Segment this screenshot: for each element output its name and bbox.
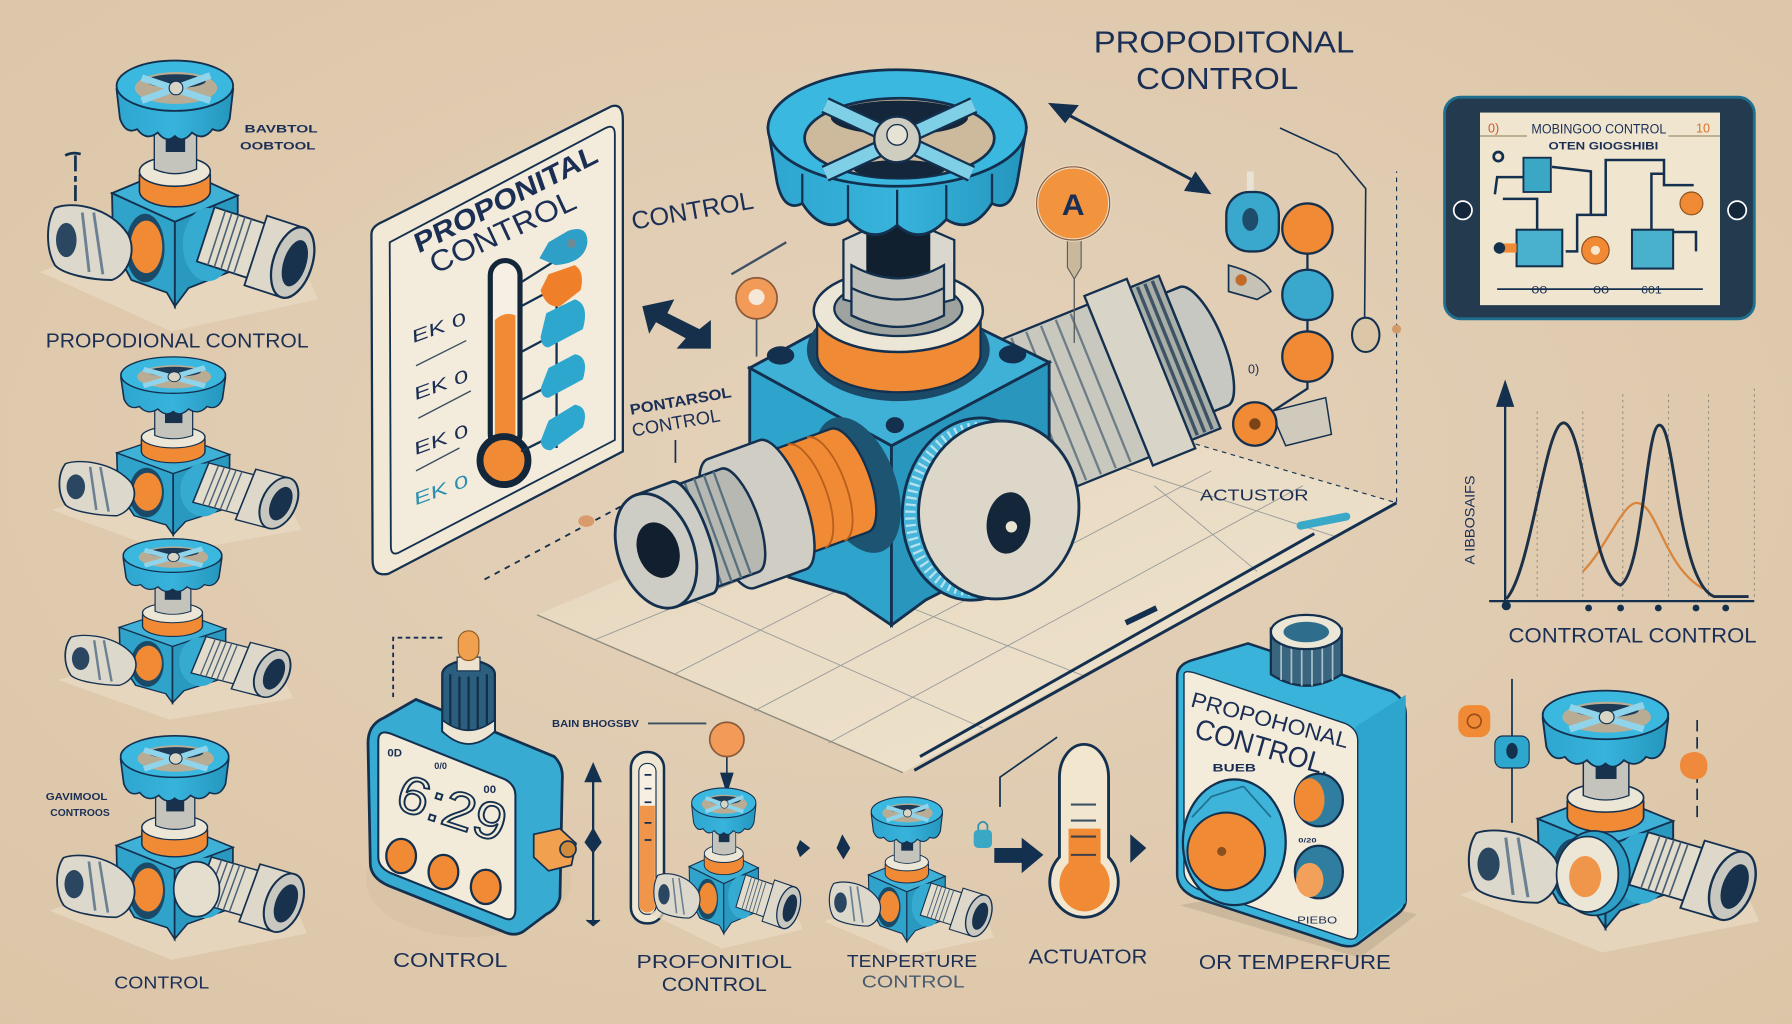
arrows between valves [797, 737, 1146, 873]
tablet heading: 0) [1488, 122, 1499, 136]
tablet heading: 10 [1696, 122, 1710, 136]
chart y label: A IBBOSAIFS [1462, 475, 1478, 565]
valve 4 disc [174, 862, 219, 917]
valve 1 callout: OOBTOOL [240, 141, 316, 153]
panel: proportional control box [1177, 615, 1417, 958]
label: proportional control [637, 951, 792, 996]
tablet scale: 00 [1531, 285, 1547, 297]
box small labels [1213, 762, 1337, 926]
board title: PROPONITAL [410, 138, 602, 259]
title [1094, 25, 1354, 96]
icon: blue lock [974, 822, 992, 848]
panel: floor sheet with grid [485, 171, 1397, 773]
controller display digits: 6:29 [389, 763, 514, 854]
label: or temperature: OR TEMPERFURE [1199, 951, 1391, 974]
icon: orange A badge: A [1062, 189, 1085, 222]
box small labels: PIEBO [1297, 915, 1337, 926]
controller buttons [386, 839, 501, 904]
arrow: vertical range [585, 763, 601, 926]
valve 2 [52, 357, 306, 553]
tablet scale [1497, 285, 1703, 297]
box small knobs [1295, 774, 1343, 898]
valve 4 callout: GAVIMOOL [46, 792, 108, 803]
controller side plug [534, 829, 576, 871]
valve 4 [46, 736, 311, 960]
box dial [1183, 779, 1286, 905]
box heading: PROPOHONAL [1188, 687, 1352, 753]
callout: small control tag: BAIN BHOGSBV [552, 719, 639, 730]
valve 1 callout: BAVBTOL [245, 124, 318, 136]
panel: tilted thermometer board [371, 106, 623, 574]
label: temperature control: CONTROL [862, 971, 965, 991]
label: valve 1: PROPODIONAL CONTROL [46, 330, 309, 352]
board scale labels: EK 0 [411, 420, 472, 459]
valve 1 pin [65, 153, 85, 206]
callout: small control tag [552, 719, 744, 794]
valve body cube [750, 288, 1049, 625]
controller knob [442, 631, 495, 744]
controller small labels [387, 748, 496, 796]
label: pontarsol control [629, 385, 733, 463]
board indicator tags [521, 229, 587, 451]
label: valve 4: CONTROL [114, 973, 209, 993]
tablet heading: MOBINGOO CONTROL [1531, 122, 1667, 137]
board title: CONTROL [424, 184, 581, 281]
label: proportional control: CONTROL [662, 974, 767, 996]
chain of sensors: 0) [1248, 363, 1259, 377]
controller small labels: 0/0 [434, 761, 447, 771]
label: pontarsol control: CONTROL [630, 404, 722, 441]
front knurled disc [891, 408, 1090, 614]
label: controller: CONTROL [393, 949, 507, 972]
label: control: CONTROL [629, 187, 756, 236]
label: pontarsol control: PONTARSOL [629, 385, 733, 419]
title: CONTROL [1136, 61, 1298, 96]
arrow: upper right double arrow [1048, 103, 1211, 194]
dark curves [1506, 423, 1749, 599]
tablet heading: OTEN GIOGSHIBI [1549, 141, 1658, 153]
arrow: left double arrow [642, 242, 786, 349]
back right pipe [994, 254, 1257, 502]
valve 5 disc [1557, 831, 1630, 915]
valve 1 callout [240, 124, 318, 153]
tablet scale: 601 [1641, 285, 1662, 297]
label: actuator: ACTUATOR [1029, 945, 1147, 968]
main valve illustration [597, 70, 1257, 637]
board scale labels: EK 0 [411, 365, 472, 404]
box small labels: 0/20 [1298, 837, 1317, 844]
chart axes [1489, 379, 1754, 611]
box small labels: BUEB [1213, 762, 1256, 774]
icon: small thermometer [631, 752, 664, 923]
board scale labels: EK 0 [411, 470, 472, 509]
valve 5 lines and markers [1458, 679, 1707, 823]
chain of sensors [1226, 128, 1401, 446]
tablet scale: 00 [1593, 285, 1609, 297]
chart x label: CONTROTAL CONTROL [1509, 624, 1757, 647]
label: temperature control: TENPERTURE [847, 951, 977, 971]
valve 6 [649, 788, 805, 949]
valve 1 top left [40, 61, 322, 331]
box heading: CONTROL. [1191, 713, 1334, 782]
icon: small orange pin [736, 278, 777, 357]
box cap [1271, 615, 1342, 686]
controller small labels: 0D [387, 748, 402, 760]
valve 4 callout [46, 792, 110, 819]
board scale labels: EK 0 [408, 308, 469, 347]
label: proportional control: PROFONITIOL [637, 951, 792, 972]
icon: large thermometer [1050, 744, 1118, 917]
tablet heading [1480, 122, 1720, 153]
handwheel [768, 70, 1026, 235]
orange curve [1583, 503, 1703, 589]
orange collar [807, 270, 990, 401]
valve 3 [58, 539, 297, 720]
board thermometer [480, 261, 528, 485]
board title [410, 138, 602, 281]
valve 7 [824, 797, 997, 956]
label: actuator on sheet: ACTUSTOR [1200, 488, 1309, 505]
board scale labels [408, 308, 472, 509]
tablet schematic [1494, 152, 1703, 269]
valve 4 callout: CONTROOS [50, 808, 110, 819]
panel: tablet diagram [1445, 97, 1754, 319]
icon: orange A badge [1037, 167, 1110, 343]
title: PROPODITONAL [1094, 25, 1354, 60]
panel: digital controller [366, 631, 576, 937]
valve stem [843, 223, 954, 327]
label: temperature control [847, 951, 977, 991]
chart: response curves [1462, 379, 1757, 647]
controller small labels: 00 [483, 784, 496, 796]
chart gridlines [1537, 389, 1754, 600]
left pipe with orange band [597, 401, 918, 637]
box heading [1188, 687, 1352, 782]
valve 5 bottom right [1458, 679, 1764, 952]
